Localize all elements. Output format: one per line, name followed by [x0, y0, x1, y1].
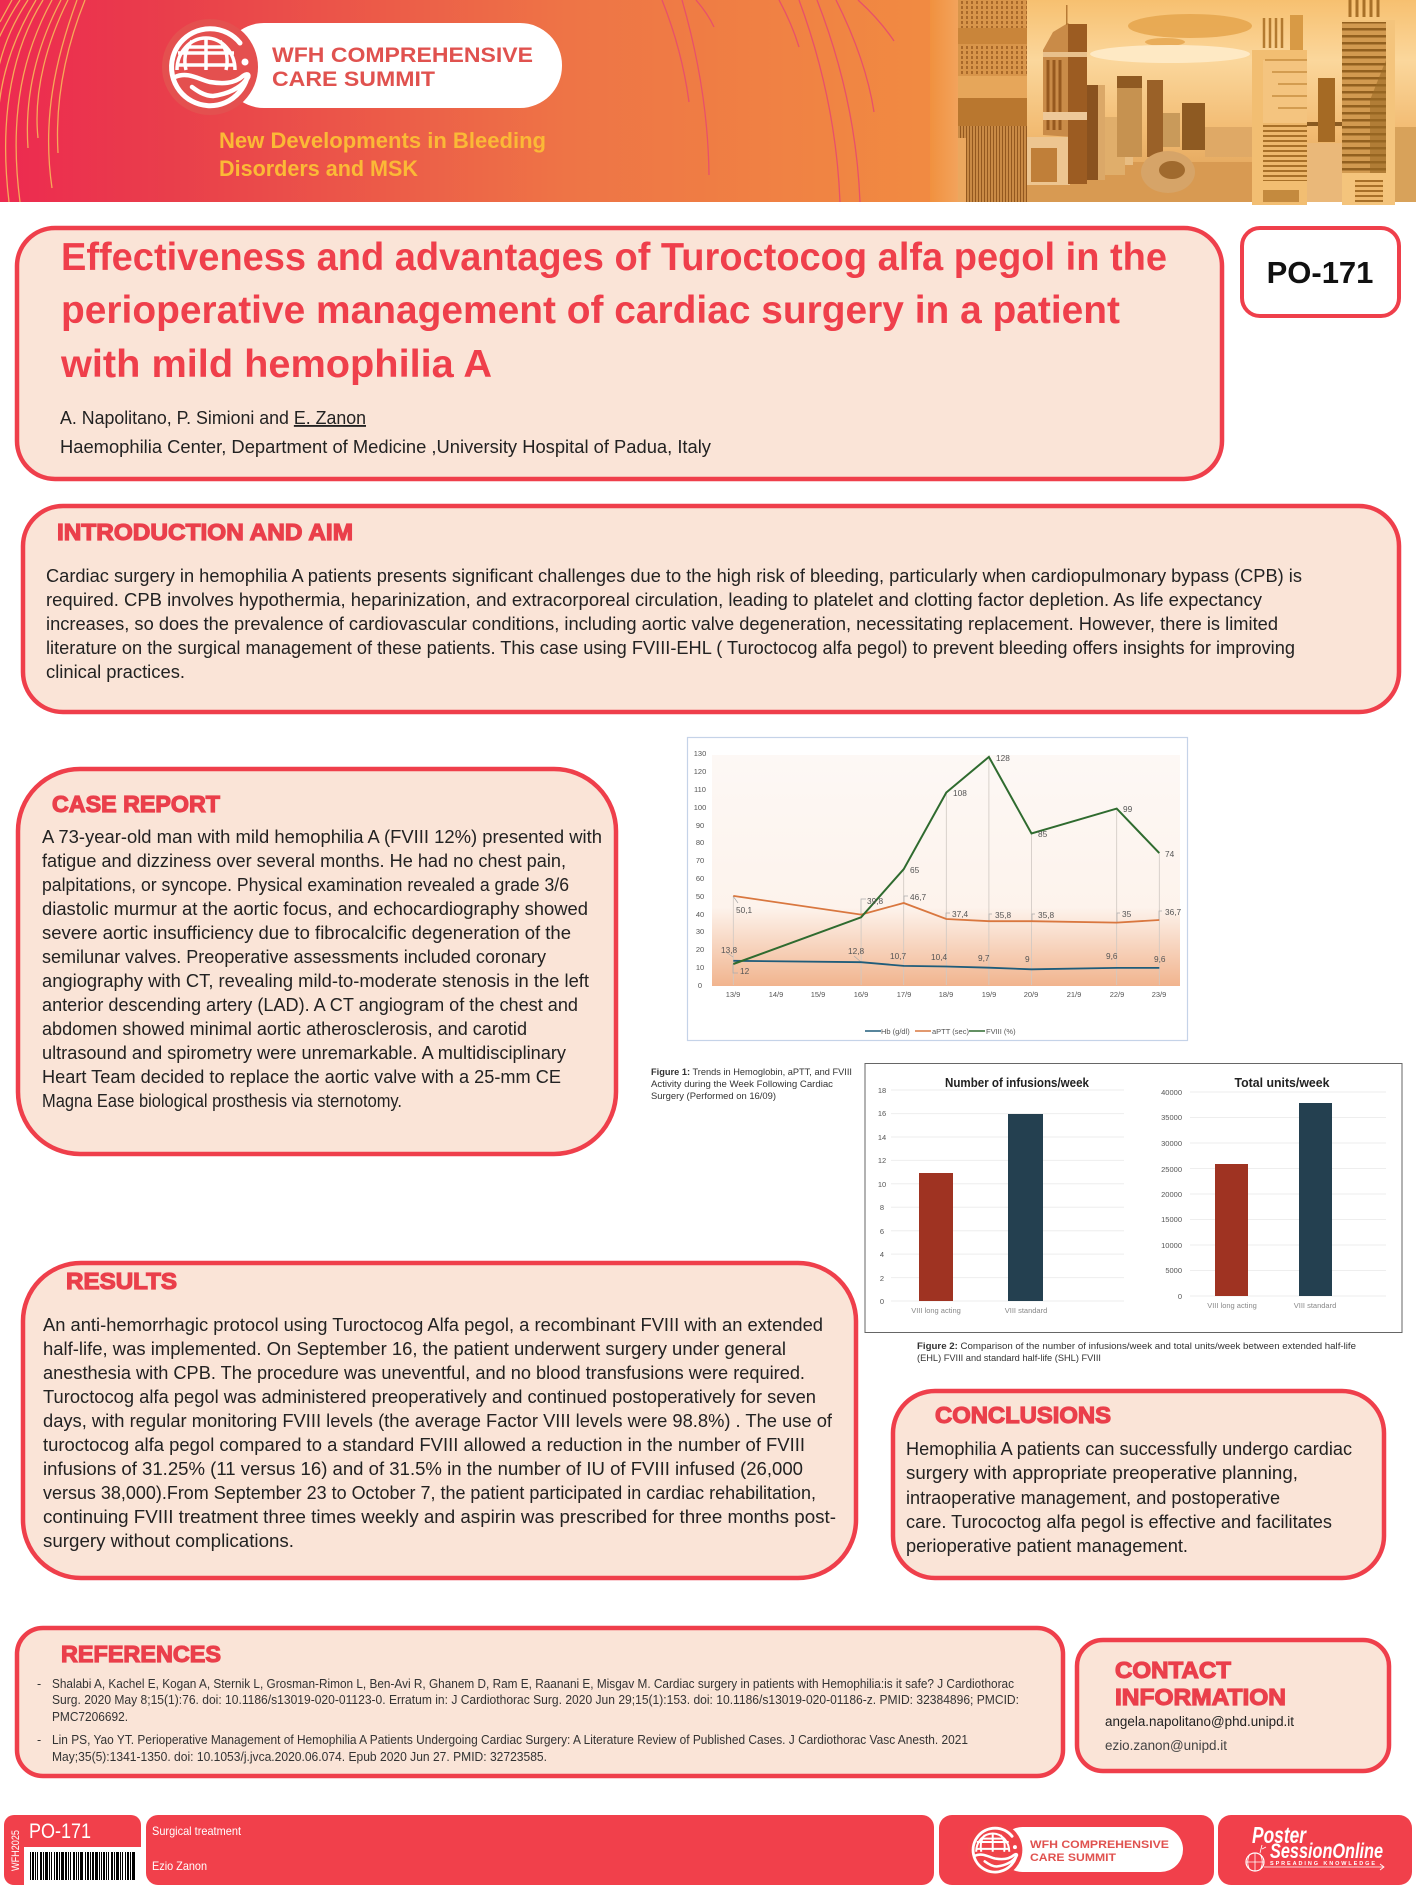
- panel: conclusions: [893, 1391, 1384, 1578]
- chart: number of infusions per week: Number of infusions/week: [945, 1076, 1089, 1090]
- poster number: PO-171: [29, 1820, 91, 1843]
- chart: total units per week: 40000: [1161, 1088, 1182, 1097]
- body text: abdomen showed minimal aortic atherosclerosis, and carotid: [42, 1018, 527, 1039]
- right towers: [1252, 50, 1307, 205]
- body text: Cardiac surgery in hemophilia A patients presents significant challenges due to the high risk of bleeding, particularly when cardiopulmonary bypass (CPB) is: [46, 565, 1302, 586]
- footer: poster id and barcode: [4, 1815, 142, 1889]
- data labels: 12: [740, 966, 750, 976]
- heading: INTRODUCTION AND AIM: [57, 519, 353, 545]
- x axis labels: [726, 990, 1166, 999]
- data labels: 36,7: [1165, 907, 1182, 917]
- body text: Hemophilia A patients can successfully undergo cardiac: [906, 1438, 1352, 1459]
- chart: total units per week: 30000: [1161, 1139, 1182, 1148]
- series: FVIII: [733, 757, 1159, 964]
- data labels: 85: [1038, 829, 1048, 839]
- reference list: -: [37, 1677, 41, 1691]
- body text: intraoperative management, and postoperative: [906, 1487, 1280, 1508]
- x axis labels: 22/9: [1110, 990, 1124, 999]
- y axis labels: 20: [696, 945, 704, 954]
- poster title: Effectiveness and advantages of Turoctocog alfa pegol in the: [61, 236, 1167, 279]
- heading: CONCLUSIONS: [935, 1402, 1111, 1428]
- data labels: 108: [953, 788, 967, 798]
- x axis labels: 14/9: [769, 990, 783, 999]
- x axis labels: 13/9: [726, 990, 740, 999]
- y axis labels: 110: [694, 785, 706, 794]
- heading: CASE REPORT: [52, 791, 220, 817]
- body text: semilunar valves. Preoperative assessments included coronary: [42, 946, 547, 967]
- body text: continuing FVIII treatment three times weekly and aspirin was prescribed for three months post-: [43, 1506, 836, 1527]
- chart: number of infusions per week: 2: [880, 1274, 884, 1283]
- data labels: 74: [1165, 849, 1175, 859]
- body text: anterior descending artery (LAD). A CT angiogram of the chest and: [42, 994, 578, 1015]
- horizon and ground: [1205, 127, 1252, 157]
- body text: clinical practices.: [46, 661, 185, 682]
- data labels: 10,4: [931, 952, 948, 962]
- figure 2 caption: Figure 2: Comparison of the number of infusions/week and total units/week between extended half-life: [917, 1341, 1356, 1352]
- panel: contact information: [1077, 1640, 1389, 1771]
- authors and affiliation: Haemophilia Center, Department of Medicine ,University Hospital of Padua, Italy: [60, 436, 712, 457]
- body text: increases, so does the prevalence of cardiovascular conditions, including aortic valve degeneration, necessitating replacement. However, there is limited: [46, 613, 1278, 634]
- footer: topic and presenter: Surgical treatment: [152, 1824, 242, 1838]
- body text: Turoctocog alfa pegol was administered preoperatively and continued postoperatively for seven: [43, 1386, 816, 1407]
- x axis labels: 21/9: [1067, 990, 1081, 999]
- data labels: 9,7: [978, 953, 990, 963]
- email addresses: angela.napolitano@phd.unipd.it: [1105, 1714, 1294, 1729]
- legend: FVIII (%): [986, 1027, 1016, 1036]
- panel: results: [23, 1263, 856, 1578]
- logo: WFH Comprehensive Care Summit: CARE SUMMIT: [272, 67, 435, 91]
- body text: palpitations, or syncope. Physical examination revealed a grade 3/6: [42, 874, 569, 895]
- footer: topic and presenter: [146, 1815, 934, 1885]
- chart: total units per week: VIII standard: [1294, 1301, 1336, 1310]
- figure 2 caption: (EHL) FVIII and standard half-life (SHL) FVIII: [917, 1353, 1101, 1364]
- authors and affiliation: [60, 407, 712, 457]
- body text: [43, 1314, 836, 1551]
- y axis labels: 30: [696, 927, 704, 936]
- header banner: [0, 0, 1416, 205]
- body text: An anti-hemorrhagic protocol using Turoctocog Alfa pegol, a recombinant FVIII with an extended: [43, 1314, 823, 1335]
- figure 2 caption: [917, 1341, 1356, 1364]
- footer: WFH logo: [939, 1815, 1214, 1885]
- legend: [865, 1027, 1016, 1036]
- chart: number of infusions per week: [878, 1076, 1124, 1315]
- city skyline image: [930, 0, 1416, 205]
- data labels: 12,8: [848, 946, 865, 956]
- data labels: 35,8: [995, 910, 1012, 920]
- reference list: Surg. 2020 May 8;15(1):76. doi: 10.1186/s13019-020-01123-0. Erratum in: J Cardiothorac Surg. 2020 Jun 29;15(1):153. doi: 10.1186/s13019-020-01186-z. PMID: 32384896; PMCID:: [52, 1693, 1019, 1707]
- footer: Poster Session Online logo: Poster: [1252, 1822, 1307, 1848]
- email addresses: ezio.zanon@unipd.it: [1105, 1738, 1227, 1753]
- body text: Heart Team decided to replace the aortic valve with a 25-mm CE: [42, 1066, 561, 1087]
- data labels: [721, 753, 1182, 976]
- y axis labels: 80: [696, 838, 704, 847]
- body text: days, with regular monitoring FVIII levels (the average Factor VIII levels were 98.8%) . The use of: [43, 1410, 833, 1431]
- logo: WFH Comprehensive Care Summit: WFH COMPREHENSIVE: [272, 43, 533, 67]
- body text: [906, 1438, 1352, 1556]
- panel: title: [17, 228, 1222, 479]
- poster title: perioperative management of cardiac surgery in a patient: [61, 289, 1120, 332]
- tower 1: [958, 0, 1027, 202]
- heading: CONTACT: [1115, 1657, 1231, 1683]
- chart: number of infusions per week: 8: [880, 1203, 884, 1212]
- reference list: PMC7206692.: [52, 1710, 128, 1724]
- data labels: 9: [1025, 954, 1030, 964]
- body text: literature on the surgical management of these patients. This case using FVIII-EHL ( Turoctocog alfa pegol) to prevent bleeding offers insights for improving: [46, 637, 1295, 658]
- data labels: 37,4: [952, 909, 969, 919]
- poster title: [60, 236, 1167, 386]
- data labels: 35,8: [1038, 910, 1055, 920]
- reference list: -: [37, 1733, 41, 1747]
- panel: case report: [18, 769, 616, 1154]
- y axis labels: 40: [696, 910, 704, 919]
- reference list: May;35(5):1341-1350. doi: 10.1053/j.jvca.2020.06.074. Epub 2020 Jun 27. PMID: 32723585.: [52, 1750, 547, 1764]
- panel: introduction and aim: [23, 506, 1399, 712]
- y axis labels: 60: [696, 874, 704, 883]
- reference list: Lin PS, Yao YT. Perioperative Management of Hemophilia A Patients Undergoing Cardiac Surgery: A Literature Review of Published Cases. J Cardiothorac Vasc Anesth. 2021: [52, 1733, 968, 1747]
- body text: [42, 826, 602, 1111]
- footer: Poster Session Online logo: [1218, 1815, 1412, 1885]
- y axis labels: 10: [696, 963, 704, 972]
- body text: required. CPB involves hypothermia, heparinization, and extracorporeal circulation, leading to platelet and clotting factor depletion. As life expectancy: [46, 589, 1263, 610]
- tagline: [219, 128, 546, 181]
- ring museum: [1141, 151, 1195, 193]
- footer: Poster Session Online logo: SessionOnline: [1270, 1840, 1383, 1863]
- body text: surgery without complications.: [43, 1530, 294, 1551]
- body text: A 73-year-old man with mild hemophilia A (FVIII 12%) presented with: [42, 826, 602, 847]
- body text: surgery with appropriate preoperative planning,: [906, 1462, 1298, 1483]
- reference list: [37, 1677, 1019, 1764]
- body text: Magna Ease biological prosthesis via sternotomy.: [42, 1090, 402, 1111]
- y axis labels: 70: [696, 856, 704, 865]
- chart: total units per week: [1161, 1076, 1386, 1310]
- x axis labels: 16/9: [854, 990, 868, 999]
- data labels: 65: [910, 865, 920, 875]
- body text: angiography with CT, revealing mild-to-moderate stenosis in the left: [42, 970, 589, 991]
- heading: RESULTS: [66, 1268, 177, 1294]
- footer: WFH logo: WFH COMPREHENSIVE: [1030, 1839, 1169, 1851]
- y axis labels: 50: [696, 892, 704, 901]
- chart: number of infusions per week: 12: [878, 1156, 886, 1165]
- vertical conference code: WFH2025: [10, 1830, 22, 1871]
- chart: total units per week: 15000: [1161, 1215, 1182, 1224]
- chart: total units per week: 20000: [1161, 1190, 1182, 1199]
- body text: severe aortic insufficiency due to fibrocalcific degeneration of the: [42, 922, 571, 943]
- x axis labels: 19/9: [982, 990, 996, 999]
- reference list: Shalabi A, Kachel E, Kogan A, Sternik L, Grosman-Rimon L, Ben-Avi R, Ghanem D, Ram E, Raanani E, Misgav M. Cardiac surgery in patients with Hemophilia:is it safe? J Cardiothorac: [52, 1677, 1014, 1691]
- panel: references: [17, 1628, 1063, 1776]
- chart: number of infusions per week: 18: [878, 1086, 886, 1095]
- x axis labels: 20/9: [1024, 990, 1038, 999]
- chart: number of infusions per week: 10: [878, 1180, 886, 1189]
- poster title: with mild hemophilia A: [60, 343, 492, 386]
- footer: Poster Session Online logo: SPREADING KNOWLEDGE: [1270, 1861, 1375, 1867]
- y axis labels: 90: [696, 821, 704, 830]
- legend: aPTT (sec): [932, 1027, 969, 1036]
- data labels: 128: [996, 753, 1010, 763]
- figure 2: bar charts: [865, 1064, 1402, 1332]
- heading: INFORMATION: [1115, 1684, 1286, 1710]
- footer: topic and presenter: Ezio Zanon: [152, 1859, 207, 1873]
- y axis labels: 0: [698, 981, 702, 990]
- footer: WFH logo: CARE SUMMIT: [1030, 1852, 1116, 1864]
- chart: number of infusions per week: 0: [880, 1297, 884, 1306]
- poster number box: [1242, 228, 1399, 316]
- data labels: 99: [1123, 804, 1133, 814]
- body text: half-life, was implemented. On September 16, the patient underwent surgery under general: [43, 1338, 786, 1359]
- tagline: New Developments in Bleeding: [219, 128, 546, 153]
- figure 1 caption: [651, 1067, 852, 1102]
- chart: total units per week: 5000: [1165, 1266, 1182, 1275]
- data labels: 9,6: [1106, 951, 1118, 961]
- chart: number of infusions per week: 6: [880, 1227, 884, 1236]
- decorative arcs: [0, 0, 894, 202]
- body text: infusions of 31.25% (11 versus 16) and of 31.5% in the number of IU of FVIII infused (26,000: [43, 1458, 803, 1479]
- chart: number of infusions per week: VIII long acting: [911, 1306, 961, 1315]
- data labels: 35: [1122, 909, 1132, 919]
- email addresses: [1105, 1714, 1294, 1753]
- y axis labels: 100: [694, 803, 706, 812]
- x axis labels: 18/9: [939, 990, 953, 999]
- chart: total units per week: VIII long acting: [1207, 1301, 1257, 1310]
- chart: number of infusions per week: 14: [878, 1133, 886, 1142]
- legend: Hb (g/dl): [881, 1027, 910, 1036]
- chart: total units per week: 35000: [1161, 1113, 1182, 1122]
- midrise buildings: [1027, 137, 1070, 185]
- data labels: 10,7: [890, 951, 907, 961]
- y axis labels: 120: [694, 767, 706, 776]
- authors and affiliation: A. Napolitano, P. Simioni and E. Zanon: [60, 407, 366, 428]
- chart: total units per week: 0: [1178, 1292, 1182, 1301]
- body text: diastolic murmur at the aortic focus, and echocardiography showed: [42, 898, 588, 919]
- chart: total units per week: 10000: [1161, 1241, 1182, 1250]
- x axis labels: 17/9: [897, 990, 911, 999]
- body text: care. Turococtog alfa pegol is effective and facilitates: [906, 1511, 1332, 1532]
- data labels: 39,8: [867, 896, 884, 906]
- body text: ultrasound and spirometry were unremarkable. A multidisciplinary: [42, 1042, 567, 1063]
- data labels: 46,7: [910, 892, 927, 902]
- y axis labels: 130: [694, 749, 706, 758]
- tagline: Disorders and MSK: [219, 156, 418, 181]
- body text: turoctocog alfa pegol compared to a standard FVIII allowed a reduction in the number of FVIII: [43, 1434, 805, 1455]
- chart: total units per week: Total units/week: [1234, 1076, 1330, 1090]
- figure 1 caption: Surgery (Performed on 16/09): [651, 1091, 776, 1102]
- data labels: 13,8: [721, 945, 738, 955]
- chart: number of infusions per week: VIII standard: [1005, 1306, 1047, 1315]
- figure 1: line chart: [688, 738, 1188, 1040]
- body text: fatigue and dizziness over several months. He had no chest pain,: [42, 850, 566, 871]
- barcode: [24, 1847, 142, 1889]
- body text: [46, 565, 1302, 682]
- figure 1 caption: Figure 1: Trends in Hemoglobin, aPTT, and FVIII: [651, 1067, 852, 1078]
- series: aPTT: [733, 896, 1159, 923]
- data labels: 50,1: [736, 905, 753, 915]
- heading: [1115, 1657, 1286, 1710]
- x axis labels: 23/9: [1152, 990, 1166, 999]
- y axis labels: [694, 749, 706, 990]
- chart: total units per week: 25000: [1161, 1165, 1182, 1174]
- body text: perioperative patient management.: [906, 1535, 1188, 1556]
- series: Hb: [733, 961, 1159, 969]
- body text: versus 38,000).From September 23 to October 7, the patient participated in cardiac rehabilitation,: [43, 1482, 816, 1503]
- heading: REFERENCES: [61, 1641, 221, 1667]
- poster number box: PO-171: [1267, 255, 1373, 290]
- logo: WFH Comprehensive Care Summit: [162, 19, 562, 115]
- chart: number of infusions per week: 4: [880, 1250, 884, 1259]
- body text: anesthesia with CPB. The procedure was uneventful, and no blood transfusions were required.: [43, 1362, 805, 1383]
- figure 1 caption: Activity during the Week Following Cardiac: [651, 1079, 833, 1090]
- x axis labels: 15/9: [811, 990, 825, 999]
- data labels: 9,6: [1154, 954, 1166, 964]
- chart: number of infusions per week: 16: [878, 1109, 886, 1118]
